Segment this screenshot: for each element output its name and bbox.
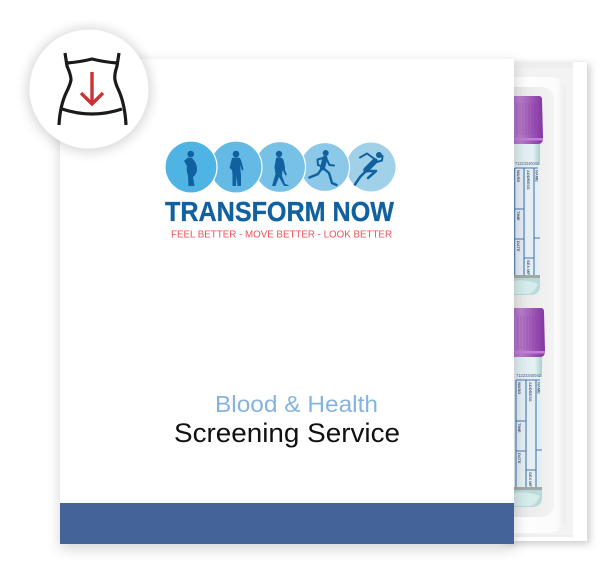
heading: Blood & Health: Blood & Health [215, 391, 378, 417]
tube label text: WARD [517, 382, 522, 394]
tube label text: ADDRESS [526, 170, 531, 190]
tube label text: TIME [517, 423, 522, 433]
tube label text: SEX MF [528, 472, 533, 487]
tube label text: 71223340042 [515, 161, 539, 166]
tube label text: DATE [517, 453, 522, 464]
tube label text [515, 161, 540, 275]
tube label text: NAME [534, 170, 540, 182]
tube label text: 71223340042 [516, 373, 541, 378]
tube label text: NAME [536, 382, 542, 394]
figure: heavy [230, 151, 244, 186]
logo tagline: FEEL BETTER - MOVE BETTER - LOOK BETTER [171, 228, 392, 240]
tube label text: TIME [516, 211, 521, 221]
figure: jogging [310, 150, 336, 185]
heading: Screening Service: Screening Service [174, 418, 400, 448]
tube label text [516, 373, 542, 487]
figure: walking [272, 151, 288, 186]
icon: red down arrow [81, 72, 103, 104]
logo: Transform Now [165, 141, 396, 240]
blood tube: lower [505, 308, 545, 507]
panel: booklet cover [60, 59, 516, 549]
blood tube: upper [505, 96, 543, 295]
tube cap [505, 308, 545, 357]
figure: sprinting [355, 152, 382, 184]
logo wordmark: TRANSFORM NOW [165, 196, 394, 227]
blue footer band [60, 503, 514, 544]
tube label text: SEX MF [526, 260, 531, 275]
tube cap [505, 96, 543, 144]
tube label text: ADDRESS [528, 382, 533, 402]
tube label text: WARD [516, 170, 521, 182]
icon: torso outline [59, 53, 126, 125]
tube label text: DATE [516, 241, 521, 252]
logo circles with progressing silhouettes [165, 141, 396, 193]
icon badge: waist reduction [27, 28, 151, 152]
figure: heaviest [184, 151, 197, 186]
panel: blood tube tray [505, 62, 590, 544]
